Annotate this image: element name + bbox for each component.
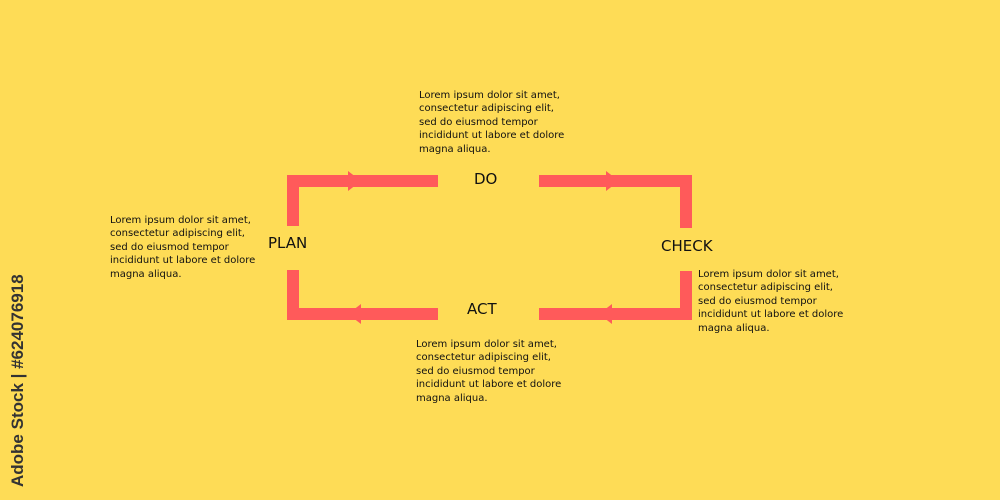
text: act: Lorem ipsum dolor sit amet, (416, 339, 557, 350)
label: ACT: ACT (467, 300, 497, 318)
text: do: magna aliqua. (419, 144, 491, 155)
arrow: act to plan (287, 270, 438, 324)
text: check (698, 269, 843, 334)
text: act: incididunt ut labore et dolore (416, 379, 561, 390)
watermark: side id: Adobe Stock | #624076918 (8, 274, 27, 487)
text: plan: magna aliqua. (110, 269, 182, 280)
text: do: incididunt ut labore et dolore (419, 130, 564, 141)
text: check: sed do eiusmod tempor (698, 296, 817, 307)
label: PLAN: PLAN (268, 234, 307, 252)
text: do (419, 90, 564, 155)
text: check: incididunt ut labore et dolore (698, 309, 843, 320)
text: do: Lorem ipsum dolor sit amet, (419, 90, 560, 101)
text: plan (110, 215, 255, 280)
text: check: magna aliqua. (698, 323, 770, 334)
text: act: sed do eiusmod tempor (416, 366, 535, 377)
text: plan: Lorem ipsum dolor sit amet, (110, 215, 251, 226)
text: act (416, 339, 561, 404)
text: plan: consectetur adipiscing elit, (110, 228, 245, 239)
text: plan: incididunt ut labore et dolore (110, 255, 255, 266)
label: CHECK: CHECK (661, 237, 713, 255)
text: check: consectetur adipiscing elit, (698, 282, 833, 293)
arrow: check to act (539, 271, 692, 324)
arrow: do to check (539, 171, 692, 228)
text: do: consectetur adipiscing elit, (419, 103, 554, 114)
label: DO: DO (474, 170, 497, 188)
text: check: Lorem ipsum dolor sit amet, (698, 269, 839, 280)
text: do: sed do eiusmod tempor (419, 117, 538, 128)
arrow: plan to do (287, 171, 438, 226)
text: plan: sed do eiusmod tempor (110, 242, 229, 253)
text: act: consectetur adipiscing elit, (416, 352, 551, 363)
text: act: magna aliqua. (416, 393, 488, 404)
